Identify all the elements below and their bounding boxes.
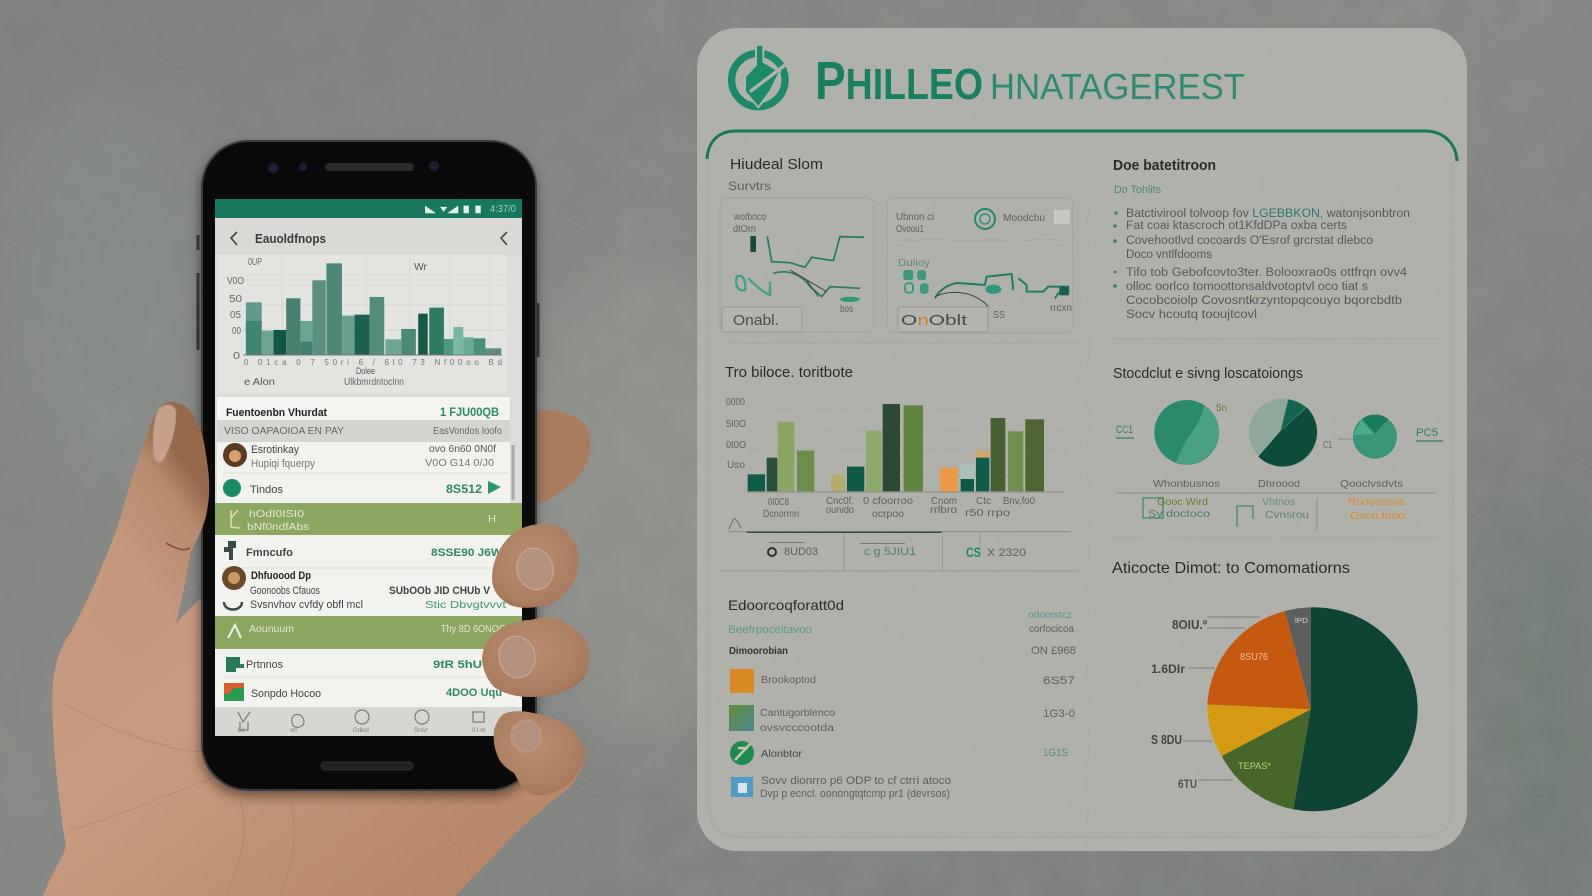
bar chart bbox=[720, 397, 1078, 572]
status bar: ◣ ▾◢ ▮ ▮ bbox=[425, 204, 482, 215]
pie labels and captions: CC1 bbox=[1116, 424, 1133, 436]
title bbox=[815, 51, 1245, 111]
pie labels and captions: PC5 bbox=[1416, 427, 1438, 439]
legend row: green: ovsvcccootda bbox=[760, 723, 835, 734]
phone bar chart bbox=[217, 255, 507, 393]
list rows group one: ovo 6n60 0N0f bbox=[429, 444, 496, 455]
line chart card two: Dulioy bbox=[898, 258, 930, 269]
pie labels and captions: Cvnsrou bbox=[1265, 510, 1309, 521]
list rows group one bbox=[217, 442, 513, 503]
section: details list bbox=[1113, 157, 1410, 321]
app header bbox=[215, 218, 522, 255]
legend row: leaf icon: 1G1S bbox=[1043, 747, 1068, 759]
bar chart: rrlbro bbox=[930, 505, 957, 516]
list rows group one: 8S512 bbox=[446, 482, 482, 496]
pie labels and captions: C1 bbox=[1323, 440, 1332, 451]
phone bar chart: e Alon bbox=[244, 377, 275, 388]
list rows group one: V0O G14 0/J0 bbox=[425, 458, 494, 469]
list rows group three: 9tR 5hU bbox=[433, 659, 482, 671]
legend row: green: Cantugorblenco bbox=[760, 708, 835, 719]
heading: details: Doe batetitroon bbox=[1113, 157, 1216, 174]
bottom navigation: orr bbox=[290, 728, 297, 734]
olive row two bbox=[215, 616, 522, 649]
pie leader labels: 1.6DIr bbox=[1151, 662, 1185, 676]
hand: ring finger bbox=[482, 617, 589, 697]
legend row: orange: Brookoptod bbox=[761, 675, 816, 686]
legend row: leaf icon bbox=[730, 741, 1068, 765]
pie labels and captions: Vhtnos bbox=[1262, 497, 1295, 508]
heading: line charts: Hiudeal Slom bbox=[730, 156, 823, 173]
list rows group two: Dhfuoood Dp bbox=[251, 570, 311, 582]
bullet list: Doco vntlfdooms bbox=[1126, 249, 1212, 261]
hand: palm behind phone bbox=[43, 523, 585, 896]
list rows group two: SUbOOb JID CHUb V bbox=[389, 585, 491, 597]
bullet list: Batctivirool tolvoop fov LGEBBKON, watonjsonbtron bbox=[1126, 208, 1410, 220]
list header card: EasVondos Ioofo bbox=[433, 426, 502, 437]
bar chart: 0000 bbox=[726, 397, 745, 408]
bullet list bbox=[1113, 208, 1410, 321]
olive row one: H bbox=[488, 514, 496, 525]
pie labels and captions: Roooovoos bbox=[1348, 497, 1405, 508]
pie labels and captions: Whonbusnos bbox=[1153, 479, 1220, 490]
bottom navigation: b1 bbox=[238, 728, 245, 734]
table header row: corfocicoa bbox=[1029, 624, 1074, 635]
line chart card one: bos bbox=[840, 304, 853, 315]
line chart card one: Onabl. bbox=[733, 312, 779, 329]
hand: palm creases bbox=[60, 700, 470, 896]
phone bar chart: 0 bbox=[233, 351, 241, 362]
pie labels and captions: Gooc Wird bbox=[1157, 497, 1208, 508]
bar chart: Ctc bbox=[976, 496, 991, 507]
line chart card two: rrcxn bbox=[1050, 303, 1072, 314]
bullet list: Covehootlvd cocoards O'Esrof grcrstat dlebco bbox=[1126, 235, 1373, 247]
table header row: odoorstcz bbox=[1028, 610, 1072, 621]
bar chart: ourvdo bbox=[826, 505, 854, 516]
bottom navigation bbox=[215, 707, 522, 736]
title: PHILLEO bbox=[815, 51, 983, 111]
bullet list: Tifo tob Gebofcovto3ter. Bolooxrao0s ottfrqn ovv4 bbox=[1126, 267, 1408, 279]
list header card: 1 FJU00QB bbox=[440, 405, 499, 419]
pie labels and captions: Sy doctoco bbox=[1148, 509, 1211, 520]
bar chart: Cnom bbox=[931, 496, 957, 507]
heading: small pies: Stocdclut e sivng loscatoiongs bbox=[1113, 365, 1303, 382]
bullet list: Socv hcoutq tooujtcovl bbox=[1126, 309, 1257, 321]
olive row two: Aounuum bbox=[249, 624, 294, 635]
bar chart: Dcnorrnn bbox=[763, 509, 799, 520]
olive row one: bNf0ndfAbs bbox=[247, 522, 309, 533]
phone bar chart: Wr bbox=[414, 262, 428, 273]
bottom navigation: 0.I m bbox=[472, 728, 485, 734]
list rows group two: Fmncufo bbox=[246, 547, 293, 559]
list header card: Fuentoenbn Vhurdat bbox=[226, 407, 327, 419]
line chart card two: Moodcbu bbox=[1003, 213, 1045, 224]
stat row under bar chart: c g 5JIU1 bbox=[864, 546, 916, 558]
hand: middle finger bbox=[492, 524, 579, 608]
subheading: legend table: Beefrpoceltavoo bbox=[728, 624, 812, 636]
pie chart one bbox=[1154, 400, 1219, 465]
line chart card one: dtOrn bbox=[733, 224, 756, 235]
phone bar chart: 0UP bbox=[248, 257, 262, 268]
line chart card two bbox=[887, 198, 1073, 333]
line chart card one bbox=[720, 198, 874, 332]
pie leader labels: S 8DU bbox=[1151, 732, 1182, 747]
app header: Eauoldfnops bbox=[255, 231, 326, 246]
legend row: green: 1G3-0 bbox=[1043, 708, 1075, 720]
status bar: 4:37/0 bbox=[490, 204, 516, 215]
status bar bbox=[215, 199, 522, 218]
phone side buttons bbox=[198, 235, 538, 357]
bar chart: 0I0C8 bbox=[768, 497, 789, 508]
bar chart: 0 cfoorroo bbox=[863, 496, 913, 507]
list rows group three: Sonpdo Hocoo bbox=[251, 688, 321, 700]
olive row one: hOdI0ISI0 bbox=[249, 509, 305, 520]
pie labels and captions bbox=[1116, 403, 1443, 530]
legend row: leaf icon: Alonbtor bbox=[761, 749, 803, 760]
section: three small pies bbox=[1113, 365, 1443, 530]
line chart card one: wotbnco bbox=[733, 212, 766, 223]
olive row two: Thy 8D 6ONOO bbox=[441, 624, 506, 635]
bar chart: Cnc0f. bbox=[826, 496, 854, 507]
legend row: orange bbox=[730, 669, 1075, 693]
phone screen bbox=[215, 199, 522, 736]
phone body bbox=[202, 141, 536, 790]
heading: bar chart: Tro biloce. toritbote bbox=[725, 364, 853, 381]
list rows group two: 8SSE90 J6W bbox=[431, 547, 503, 559]
section: large pie chart bbox=[1112, 560, 1418, 811]
phone bar chart: 00 bbox=[232, 326, 241, 337]
little finger nail bbox=[511, 720, 541, 752]
list header card bbox=[217, 397, 510, 442]
line chart card two: SS bbox=[993, 310, 1005, 321]
pie leader labels: TEPAS* bbox=[1238, 761, 1272, 771]
legend row: blue note: Sovv dionrro p6 ODP to cf ctrri atoco bbox=[761, 775, 951, 787]
list rows group one: Tindos bbox=[250, 484, 284, 496]
pie chart three bbox=[1353, 414, 1397, 459]
phone speaker and cameras bbox=[268, 161, 439, 173]
section: grouped bar chart bbox=[720, 364, 1078, 572]
title: HNATAGEREST bbox=[990, 66, 1245, 107]
bullet list: Cocobcoiolp Covosntkrzyntopqcouyo bqorcbdtb bbox=[1126, 295, 1402, 307]
phone bbox=[198, 141, 538, 796]
pie leader labels: lPD bbox=[1295, 618, 1308, 625]
bar chart: Uso bbox=[727, 460, 745, 471]
pie labels and captions: Oscn.fooo bbox=[1350, 511, 1406, 522]
pie chart two bbox=[1249, 398, 1318, 467]
panel: report sheet bbox=[697, 28, 1467, 851]
table header row: ON £968 bbox=[1031, 645, 1076, 657]
phone home bar bbox=[321, 762, 413, 770]
bullet list: olloc oorlco tomoottonsaldvotoptvl oco tiat s bbox=[1126, 281, 1368, 293]
bar chart: Bnv,fo0 bbox=[1003, 496, 1035, 507]
list rows group two bbox=[215, 535, 522, 616]
subheading: details: Do Tohlits bbox=[1114, 184, 1161, 196]
large pie chart bbox=[1207, 607, 1418, 811]
pie leader labels: 8OIU.º bbox=[1172, 617, 1207, 632]
heading: legend table: Edoorcoqforatt0d bbox=[728, 597, 844, 613]
icon: company logo bbox=[732, 45, 785, 107]
hand: thumb over phone bbox=[90, 402, 209, 660]
pie leader labels: 6TU bbox=[1178, 777, 1197, 791]
phone bar chart: Dolee bbox=[356, 366, 375, 376]
list rows group two: Goonoobs Cfauos bbox=[250, 585, 320, 597]
bottom navigation: Srsvr bbox=[414, 728, 428, 734]
phone bar chart: 0 01ca 0 7 50ri 6 / 6l0 73 Nf00oo Bd bbox=[244, 358, 502, 367]
bottom navigation: Gdkot bbox=[353, 728, 369, 734]
stat row under bar chart: X 2320 bbox=[987, 547, 1026, 559]
list rows group two: Svsnvhov cvfdy obfl mcl bbox=[250, 599, 363, 611]
legend row: orange: 6S57 bbox=[1043, 675, 1075, 687]
pie leader labels: 8SU76 bbox=[1240, 652, 1268, 663]
stat row under bar chart: CS bbox=[966, 544, 981, 560]
hand: little finger bbox=[494, 711, 585, 795]
bullet list: Fat coai ktascroch ot1KfdDPa oxba certs bbox=[1126, 220, 1347, 232]
thumb nail bbox=[153, 405, 176, 463]
list header card: VISO OAPAOIOA EN PAY bbox=[224, 426, 344, 437]
ring finger nail bbox=[495, 633, 539, 681]
legend row: green bbox=[729, 705, 1075, 734]
pie labels and captions: 5n bbox=[1216, 403, 1227, 414]
header rule bbox=[707, 131, 1457, 161]
phone bar chart: 50 bbox=[229, 294, 243, 305]
line chart card two: O nOblt bbox=[901, 312, 968, 329]
line chart card two: Ovoou1 bbox=[896, 224, 924, 235]
bar chart: ocrpoo bbox=[872, 509, 904, 520]
phone bar chart: 05 bbox=[230, 310, 241, 321]
phone bar chart: Ulkbmrdntoclnn bbox=[344, 377, 404, 388]
phone bar chart: V0O bbox=[227, 276, 244, 287]
legend row: blue note: Dvp p ecncl. oonongtqtcmp pr1 (devrsos) bbox=[760, 788, 950, 800]
bar chart: 5I0O bbox=[726, 419, 746, 430]
heading: large pie: Aticocte Dimot: to Comomatiorns bbox=[1112, 560, 1350, 577]
bar chart: r50 rrpo bbox=[965, 508, 1011, 519]
table header row: Dimoorobian bbox=[729, 646, 788, 657]
stat row under bar chart bbox=[768, 544, 1026, 560]
middle finger nail bbox=[512, 544, 558, 594]
list rows group two: Stic Dbvgtvvvt bbox=[425, 600, 506, 611]
bar chart: 0t0O bbox=[726, 440, 746, 451]
list rows group one: Hupiqi fquerpy bbox=[251, 458, 315, 470]
line chart card two: Ubnon ci bbox=[896, 212, 934, 223]
section: legend table bbox=[728, 597, 1076, 800]
legend row: blue note bbox=[731, 775, 951, 800]
list rows group one: Esrotinkay bbox=[251, 444, 299, 456]
list rows group three: Prtnnos bbox=[246, 659, 283, 671]
list rows group three bbox=[215, 649, 522, 707]
hand: index finger behind phone bbox=[530, 411, 590, 505]
pie labels and captions: Qooclvsdvts bbox=[1340, 479, 1403, 490]
subheading: line charts: Survtrs bbox=[728, 179, 771, 193]
olive row one bbox=[215, 503, 522, 535]
section: line charts bbox=[720, 156, 1073, 333]
pie labels and captions: Dhroood bbox=[1258, 479, 1300, 490]
pie leader labels bbox=[1151, 617, 1308, 791]
table header row bbox=[729, 610, 1076, 657]
stat row under bar chart: 8UD03 bbox=[784, 546, 818, 558]
list rows group three: 4DOO Uqu bbox=[446, 687, 502, 699]
